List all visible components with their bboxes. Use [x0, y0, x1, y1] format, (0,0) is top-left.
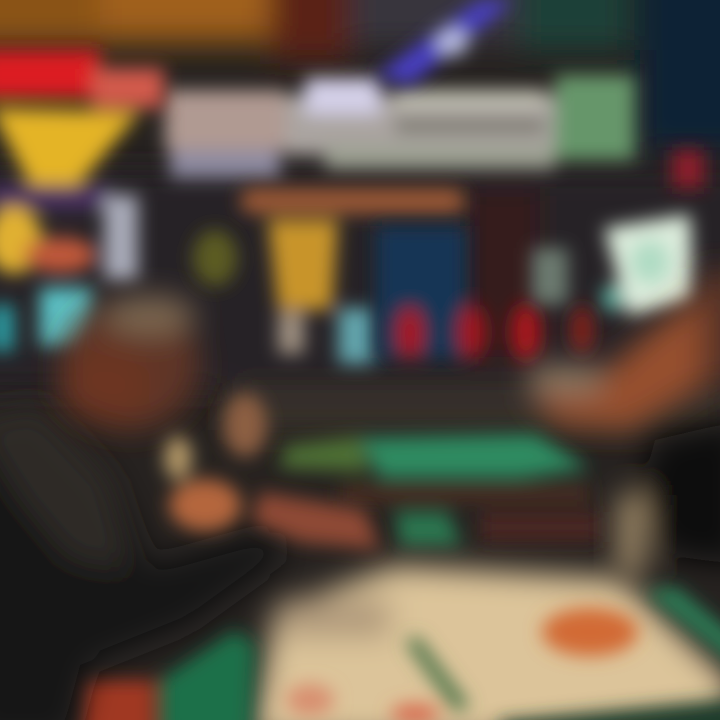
banner: blurred sign [165, 75, 635, 178]
left lights: red, yellow and cyan shapes [0, 50, 237, 351]
arm: raised hand holding phone [530, 270, 720, 430]
panel: blue backdrop with red lights [376, 150, 704, 361]
table: cream betting surface [250, 565, 720, 720]
phone: raised white screen [532, 214, 694, 316]
table: green corner felt [80, 630, 255, 720]
streak: purple-blue light [375, 0, 515, 85]
hand: player's reaching hand [164, 393, 380, 550]
figure: yellow and orange statue [240, 188, 465, 364]
table: chips and markings [286, 586, 720, 720]
person: dark foreground right [618, 420, 720, 575]
head: player's hair [59, 295, 200, 431]
table: green felt strip [280, 434, 600, 546]
person: dark seated player [0, 405, 280, 720]
background: wall and ceiling [0, 0, 720, 430]
